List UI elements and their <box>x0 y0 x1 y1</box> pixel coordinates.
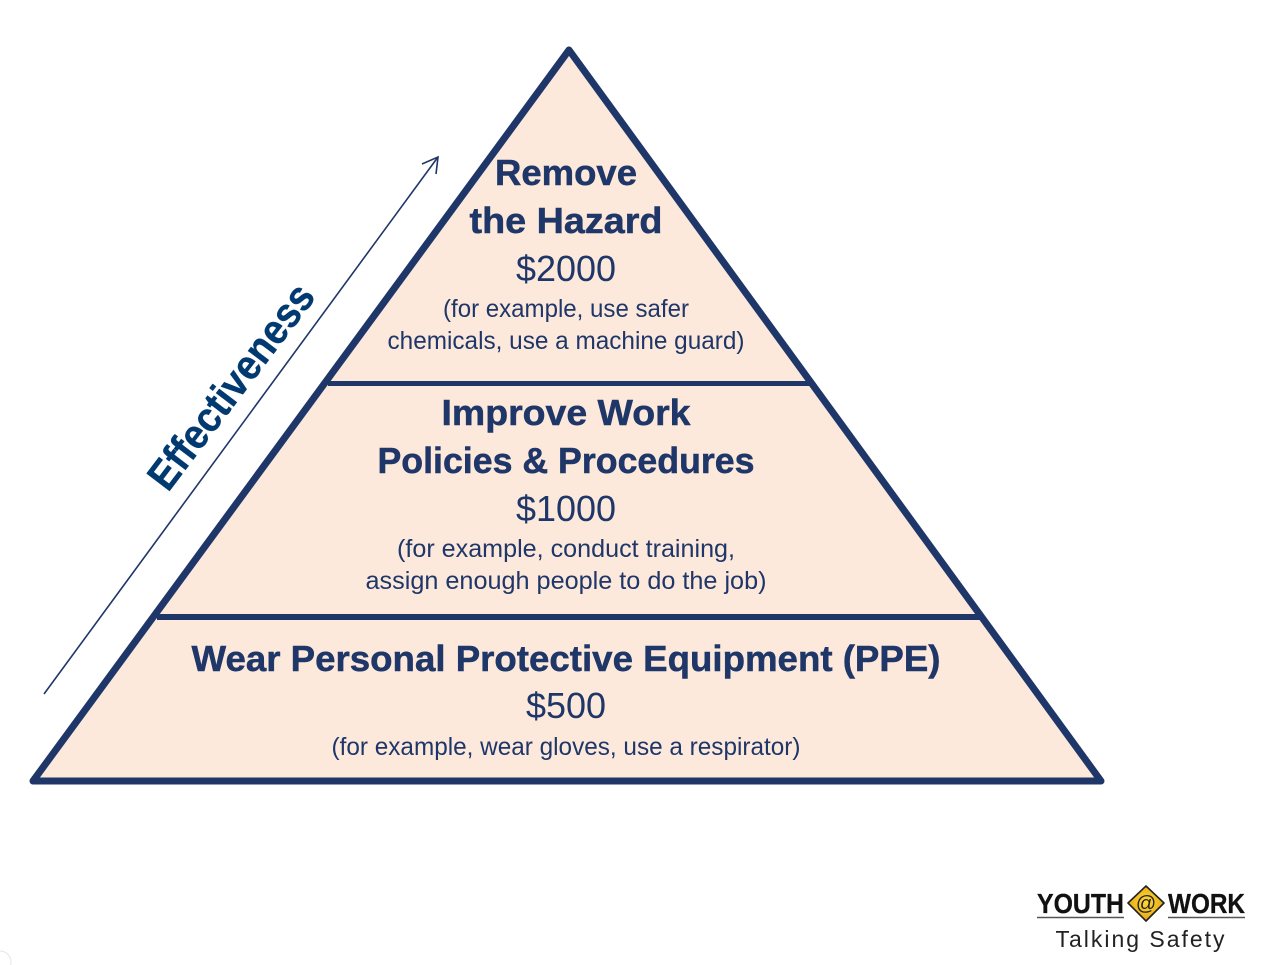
tier: wear personal protective equipment: (for example, wear gloves, use a respirator) <box>332 733 800 761</box>
logo: youth at work talking safety <box>1037 886 1245 952</box>
tier: remove the hazard <box>388 152 744 355</box>
label: effectiveness: Effectiveness <box>138 274 324 498</box>
tier: wear personal protective equipment: Wear Personal Protective Equipment (PPE) <box>192 638 940 679</box>
tier: improve work policies and procedures: Improve Work <box>442 392 692 433</box>
icon: yellow diamond: @ <box>1136 893 1156 915</box>
tier: remove the hazard: Remove <box>495 152 637 193</box>
tier: wear personal protective equipment: $500 <box>526 685 606 726</box>
tier: improve work policies and procedures: assign enough people to do the job) <box>366 567 766 595</box>
faint corner mark <box>0 951 11 965</box>
tier: improve work policies and procedures: (for example, conduct training, <box>397 535 735 563</box>
tier: wear personal protective equipment <box>192 638 940 761</box>
tier: improve work policies and procedures: Policies & Procedures <box>378 440 754 481</box>
arrow: effectiveness direction <box>44 157 438 694</box>
icon: yellow diamond <box>1128 886 1164 921</box>
tier: improve work policies and procedures <box>366 392 766 595</box>
logo: youth at work talking safety: YOUTH <box>1037 888 1124 919</box>
logo: youth at work talking safety: WORK <box>1168 888 1245 919</box>
tier: remove the hazard: the Hazard <box>470 200 662 241</box>
logo: youth at work talking safety: Talking Safety <box>1056 926 1225 952</box>
tier: remove the hazard: $2000 <box>516 248 616 289</box>
tier: remove the hazard: chemicals, use a machine guard) <box>388 327 744 355</box>
tier: remove the hazard: (for example, use safer <box>443 295 689 323</box>
pyramid <box>33 50 1101 781</box>
tier: improve work policies and procedures: $1000 <box>516 488 616 529</box>
